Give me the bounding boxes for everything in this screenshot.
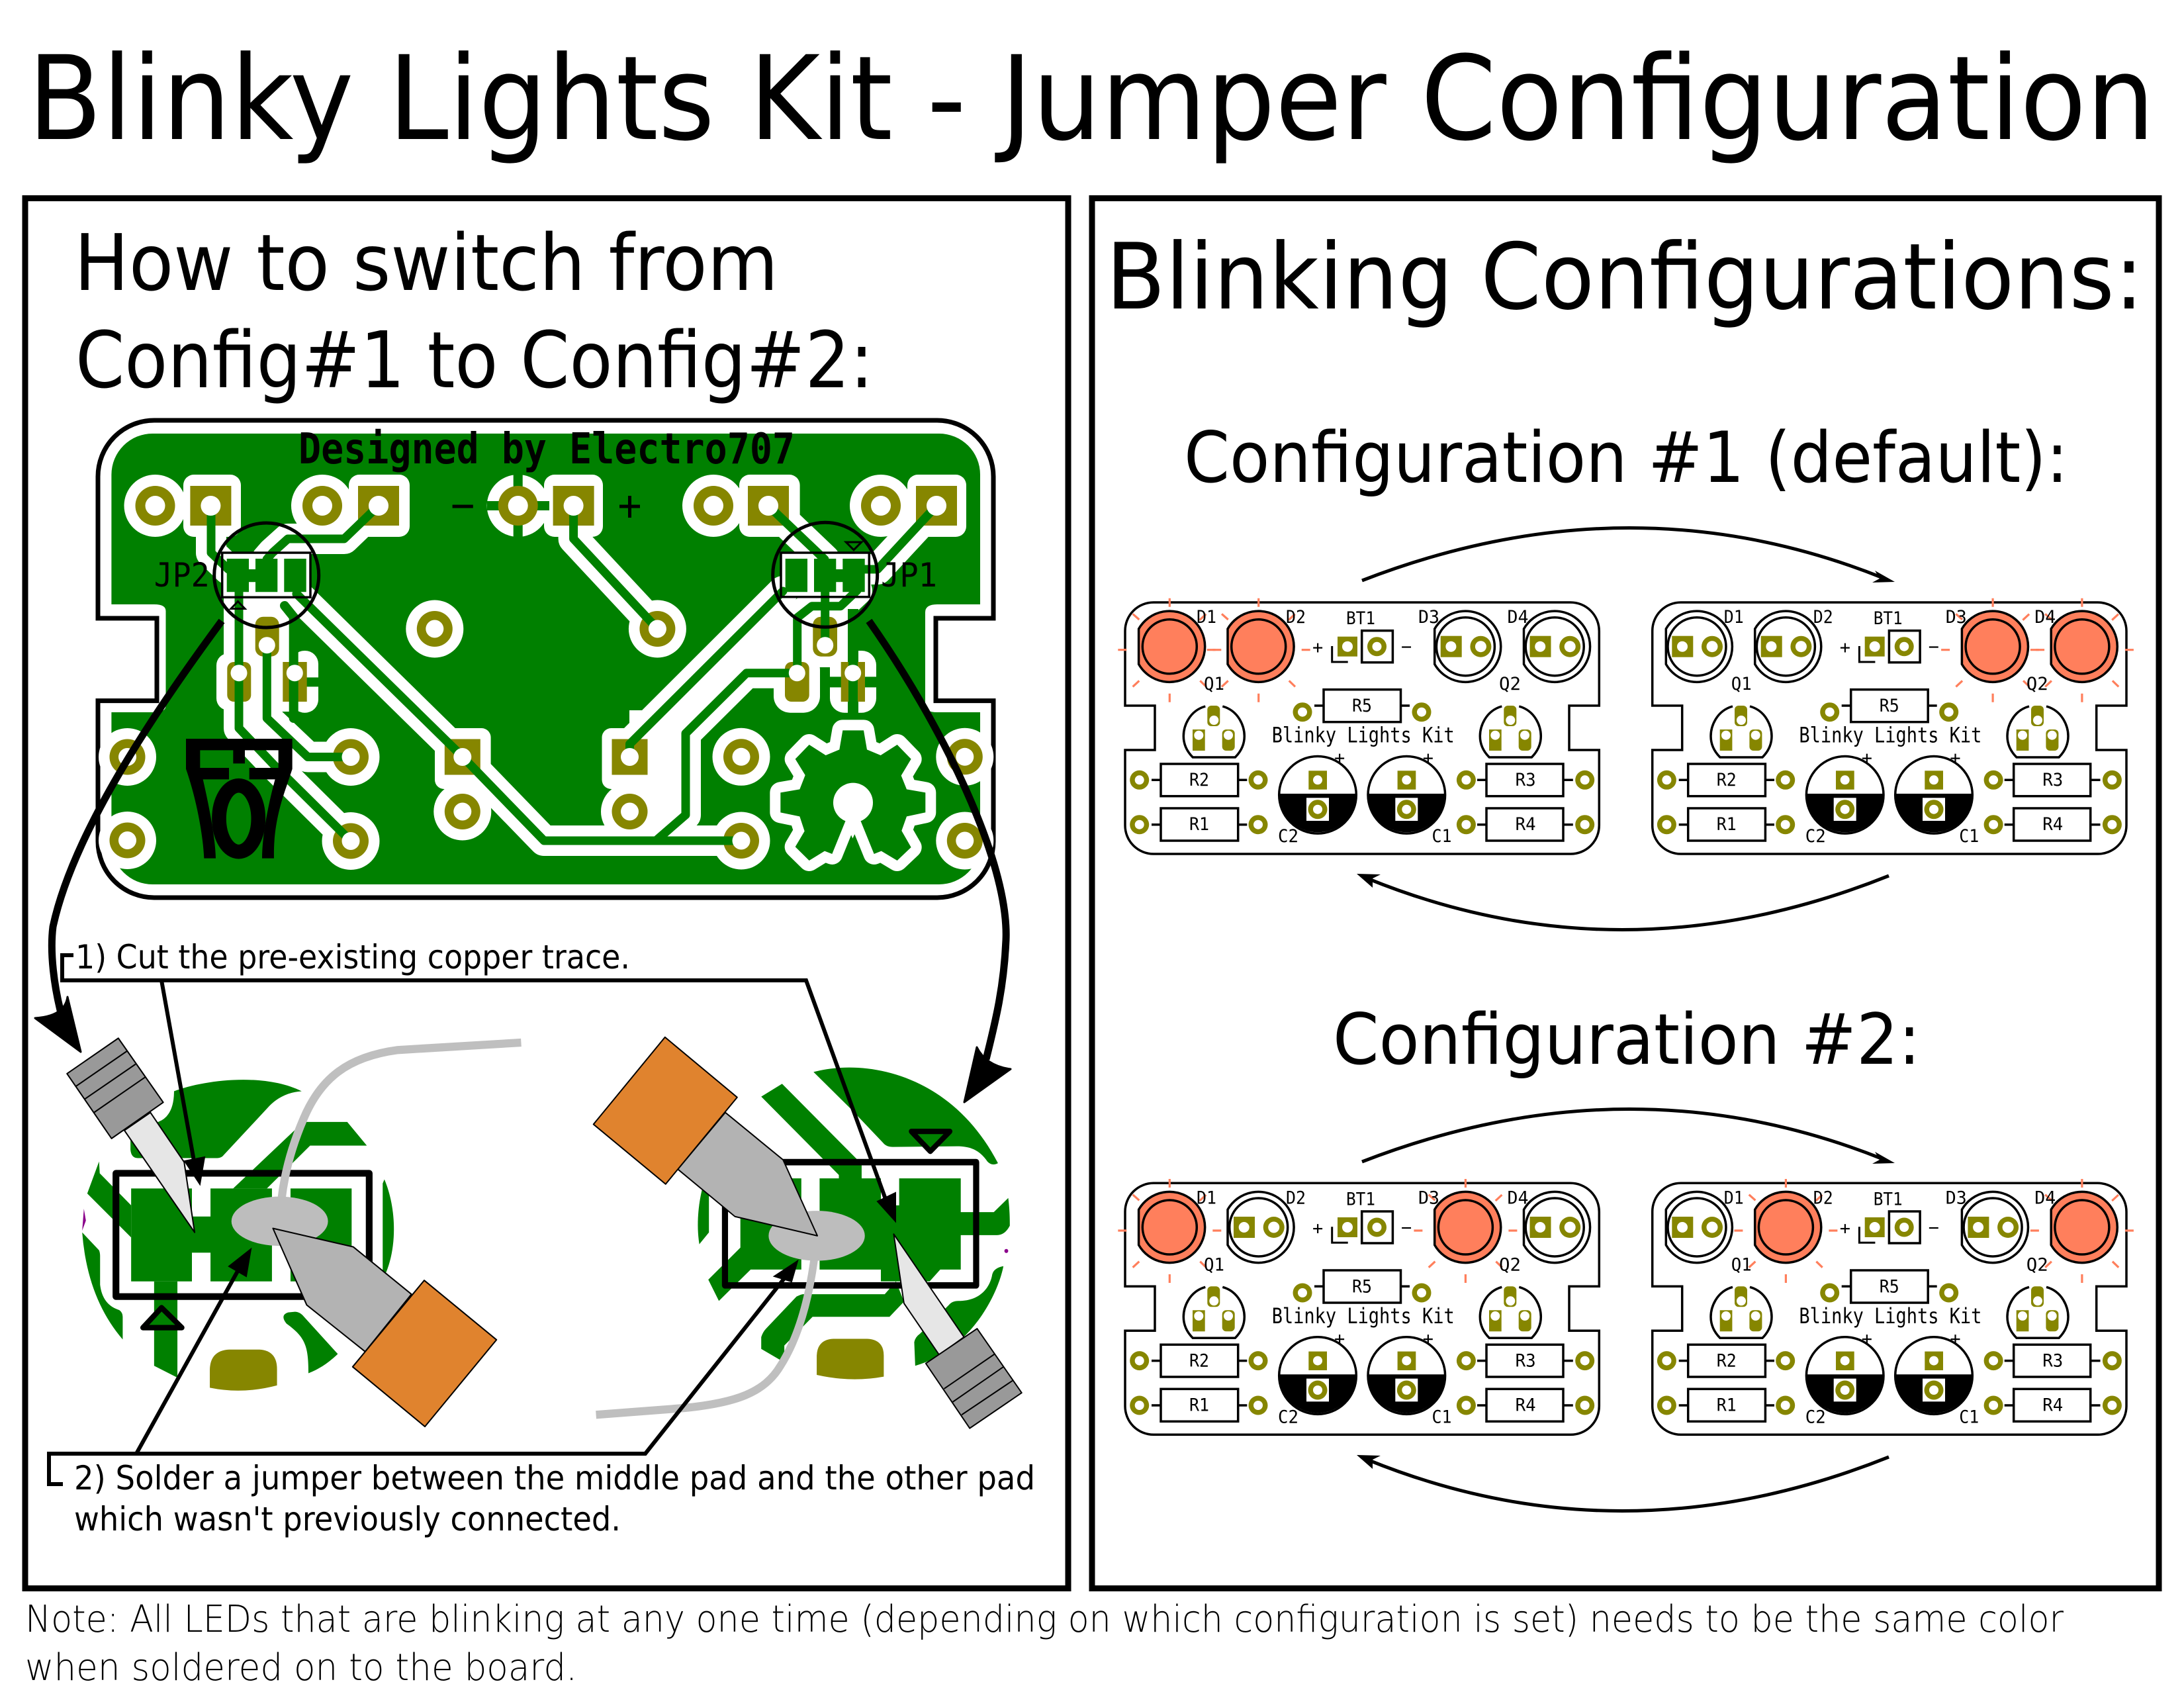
board labels: Q1 (1731, 674, 1752, 694)
drill holes (118, 496, 974, 850)
board labels: + (1950, 1329, 1961, 1349)
LEDs (1118, 1179, 1590, 1283)
board labels: R1 (1717, 1395, 1737, 1415)
board labels: R1 (1717, 814, 1737, 835)
silk screen markers (453, 496, 640, 518)
arrow: board to right detail (869, 621, 1011, 1102)
hobby knife right (893, 1234, 1022, 1429)
copper shapes left (82, 1080, 394, 1378)
jumper JP2 (154, 523, 319, 628)
heading: blinking configurations: Blinking Configurations: (1106, 224, 2144, 330)
board labels: C2 (1805, 826, 1826, 847)
jumper outline left (116, 1173, 369, 1297)
board labels: C1 (1432, 1407, 1452, 1427)
soldering iron left (273, 1229, 496, 1427)
jumper JP1: JP1 (881, 556, 937, 594)
board labels: D1 (1724, 607, 1744, 628)
board labels (1189, 607, 1536, 847)
board labels: R5 (1352, 696, 1372, 716)
jumper wire left (281, 1043, 521, 1200)
heading: configuration 1: Configuration #1 (default): (1184, 417, 2068, 498)
board labels: + (1423, 748, 1433, 769)
board labels: R4 (1516, 814, 1536, 835)
hobby knife left (67, 1038, 195, 1233)
board labels: R3 (1516, 770, 1536, 790)
callout 1 lines and arrows (62, 955, 895, 1221)
board: config 2 state B, D2 and D4 lit (1653, 1179, 2134, 1434)
board labels: − (1929, 637, 1939, 657)
board labels: R2 (1717, 770, 1737, 790)
board labels: Q1 (1204, 674, 1224, 694)
board labels: + (1334, 1329, 1345, 1349)
board labels: BT1 (1346, 608, 1375, 629)
step 2 text (74, 1459, 1035, 1538)
copper trace clearance (211, 506, 936, 841)
board labels: D1 (1724, 1188, 1744, 1208)
arrow: config 1 top (1362, 528, 1895, 583)
solder pads (110, 486, 983, 859)
board labels: C1 (1432, 826, 1452, 847)
right detail: cutting and soldering (594, 1037, 1022, 1429)
LEDs (1666, 598, 2134, 702)
arrow: board to left detail (35, 621, 222, 1052)
board labels: D2 (1813, 1188, 1833, 1208)
board labels: + (1312, 637, 1323, 658)
soldering iron right (594, 1037, 817, 1236)
board labels: + (1862, 748, 1872, 769)
board labels: BT1 (1874, 1189, 1903, 1209)
board labels: D3 (1946, 1188, 1967, 1208)
board labels: Q1 (1204, 1254, 1224, 1275)
board labels: R3 (2042, 770, 2063, 790)
board labels: Blinky Lights Kit (1272, 1303, 1455, 1329)
board labels: + (1862, 1329, 1872, 1349)
thermal spokes over pads (294, 662, 853, 702)
gear logo (780, 730, 925, 861)
board labels: R5 (1880, 1276, 1899, 1297)
board labels: R5 (1880, 696, 1899, 716)
board labels: D3 (1418, 1188, 1439, 1208)
board labels: − (1401, 1217, 1412, 1238)
board labels: Q1 (1731, 1254, 1752, 1275)
board labels: R2 (1189, 770, 1209, 790)
LEDs (1666, 1179, 2134, 1283)
board labels: D2 (1813, 607, 1833, 628)
arrow: config 2 bottom (1357, 1455, 1889, 1511)
arrow: config 1 bottom (1357, 874, 1889, 930)
LEDs (1118, 598, 1590, 702)
board labels: D3 (1418, 607, 1439, 628)
board labels: Q2 (2026, 1254, 2048, 1275)
board labels: Q2 (2026, 674, 2048, 694)
board labels: + (1312, 1218, 1323, 1239)
board labels: D4 (2034, 1188, 2056, 1208)
jumper JP1 (773, 522, 937, 627)
board labels: D4 (1508, 607, 1529, 628)
board labels: R5 (1352, 1276, 1372, 1297)
board labels: − (1401, 637, 1412, 657)
step 2 text: 2) Solder a jumper between the middle pad and the other pad (74, 1459, 1035, 1497)
heading: configuration 2: Configuration #2: (1333, 999, 1921, 1080)
board labels (1717, 1188, 2063, 1427)
board labels: Blinky Lights Kit (1272, 723, 1455, 748)
board labels: BT1 (1346, 1189, 1375, 1209)
jumper wire right (596, 1260, 814, 1415)
board labels: R4 (1516, 1395, 1536, 1415)
board labels: C1 (1959, 826, 1979, 847)
board labels: − (1929, 1217, 1939, 1238)
callout 2 lines and arrows (49, 1249, 797, 1484)
board labels: R2 (1717, 1350, 1737, 1371)
board labels: R4 (2042, 1395, 2063, 1415)
board labels: + (1840, 637, 1850, 658)
board labels: C2 (1278, 1407, 1298, 1427)
board labels: D4 (1508, 1188, 1529, 1208)
board labels: Blinky Lights Kit (1799, 1303, 1981, 1329)
board labels (1189, 1188, 1536, 1427)
board labels: D2 (1286, 607, 1306, 628)
board labels: C1 (1959, 1407, 1979, 1427)
board labels: C2 (1805, 1407, 1826, 1427)
heading: how to switch (74, 217, 874, 406)
board labels: D4 (2034, 607, 2056, 628)
board labels: C2 (1278, 826, 1298, 847)
thermal spokes and pour remnants (285, 475, 880, 718)
board labels: Blinky Lights Kit (1799, 723, 1981, 748)
step 1 text: 1) Cut the pre-existing copper trace. (75, 938, 630, 976)
board labels: R3 (2042, 1350, 2063, 1371)
board labels: Q2 (1499, 1254, 1521, 1275)
step 2 text: which wasn't previously connected. (74, 1500, 621, 1538)
board labels: D3 (1946, 607, 1967, 628)
board labels: + (1423, 1329, 1433, 1349)
board labels: + (1840, 1218, 1850, 1239)
board: config 1 state A, D1 and D2 lit (1118, 598, 1599, 854)
board labels: BT1 (1874, 608, 1903, 629)
board labels: D2 (1286, 1188, 1306, 1208)
heading: how to switch: How to switch from (74, 217, 778, 308)
board: config 1 state B, D3 and D4 lit (1653, 598, 2134, 854)
F7 logo (186, 739, 293, 859)
board credit text: Designed by Electro707 (298, 425, 795, 474)
large PCB board (98, 420, 993, 898)
jumper JP2: JP2 (154, 556, 210, 594)
board labels: R1 (1189, 814, 1209, 835)
copper shapes right (698, 1068, 1010, 1366)
board labels: D1 (1197, 1188, 1216, 1208)
board labels: R3 (1516, 1350, 1536, 1371)
jumper outline right (725, 1162, 976, 1286)
board: config 2 state A, D1 and D3 lit (1118, 1179, 1599, 1434)
footnote: Note: All LEDs that are blinking at any one time (depending on which configuration is set) needs to be the same color (25, 1598, 2064, 1641)
board labels (1717, 607, 2063, 847)
heading: how to switch: Config#1 to Config#2: (75, 314, 874, 406)
footnote (25, 1598, 2064, 1688)
board labels: R1 (1189, 1395, 1209, 1415)
board labels: + (1334, 748, 1345, 769)
copper traces (211, 506, 936, 841)
board labels: D1 (1197, 607, 1216, 628)
board labels: R4 (2042, 814, 2063, 835)
board labels: + (1950, 748, 1961, 769)
left detail: cutting and soldering (67, 1038, 521, 1427)
arrow: config 2 top (1362, 1109, 1895, 1164)
panel: blinking configurations (1092, 199, 2159, 1589)
board labels: R2 (1189, 1350, 1209, 1371)
board labels: Q2 (1499, 674, 1521, 694)
